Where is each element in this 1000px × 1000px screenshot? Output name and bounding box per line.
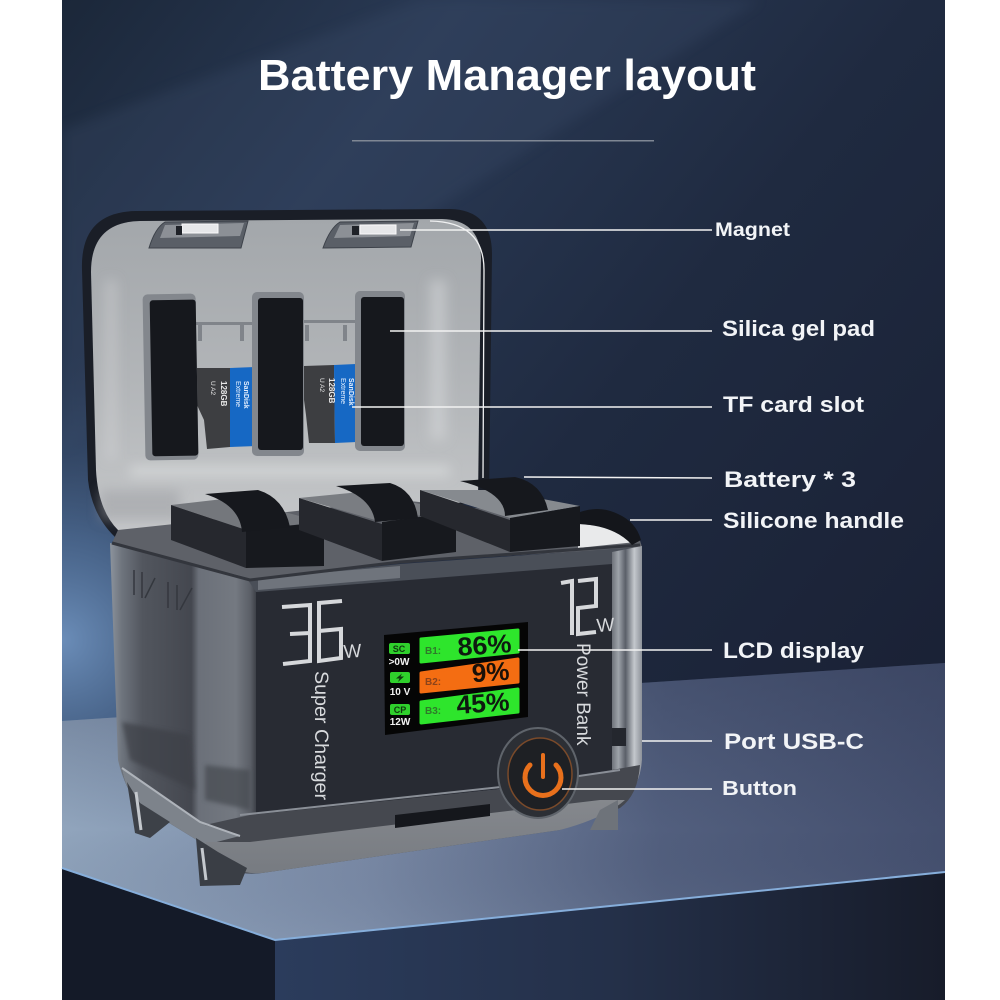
status column: CP — [394, 705, 406, 715]
battery 3 — [420, 477, 580, 552]
base body — [110, 543, 642, 886]
B1 bar: B1: — [425, 646, 441, 657]
B2 bar: 9% — [471, 656, 510, 688]
port slot — [395, 804, 490, 828]
12W mark — [561, 579, 615, 637]
status column: 10 V — [390, 687, 411, 698]
open lid — [82, 209, 492, 560]
B3 bar: 45% — [455, 686, 510, 720]
callout: Silica gel pad: Silica gel pad — [722, 316, 875, 341]
lid shading — [100, 280, 450, 520]
status column: >0W — [389, 657, 410, 668]
TF cards: U A2 — [209, 381, 216, 395]
lower tray — [205, 800, 625, 873]
battery 2 — [299, 483, 456, 561]
silicone handle — [580, 509, 641, 545]
TF cards: Extreme — [339, 378, 346, 404]
TF cards: SanDisk — [242, 381, 249, 409]
feet — [127, 782, 170, 838]
title rule — [352, 140, 654, 142]
bolt icon — [396, 674, 404, 682]
TF cards: 128GB — [327, 378, 336, 404]
power button — [498, 728, 578, 818]
callout: Magnet: Magnet — [715, 220, 791, 241]
lower band — [122, 765, 640, 874]
status column: SC — [393, 644, 406, 654]
battery 1 — [171, 490, 324, 568]
transparent shell left side — [110, 543, 258, 845]
callout: Port USB-C: Port USB-C — [724, 729, 864, 754]
TF cards — [197, 364, 357, 449]
TF cards: Extreme — [234, 381, 241, 407]
base top surface — [112, 500, 642, 580]
magnets — [149, 221, 418, 248]
B2 bar: B2: — [425, 677, 441, 688]
title: Battery Manager layout — [258, 51, 756, 100]
status column — [389, 643, 411, 728]
upper lip band — [248, 547, 640, 592]
lid highlight edge — [430, 221, 484, 478]
B2 bar — [421, 656, 518, 692]
status column: 12W — [390, 717, 411, 728]
callout: LCD display: LCD display — [723, 638, 865, 663]
TF cards: SanDisk — [347, 378, 354, 406]
white top patch — [578, 524, 636, 548]
callout: Button: Button — [722, 778, 797, 800]
TF cards: U A2 — [318, 378, 325, 392]
callout: Silicone handle: Silicone handle — [723, 508, 904, 533]
silica gel pads — [143, 291, 405, 460]
table surface — [62, 663, 945, 1000]
12W mark: W — [596, 615, 615, 637]
Super Charger label: Super Charger — [310, 671, 331, 801]
front dark panel — [256, 563, 612, 815]
product: battery manager case — [82, 209, 642, 886]
TF cards: 128GB — [219, 381, 228, 407]
batteries — [171, 477, 641, 568]
36W mark — [282, 601, 362, 664]
36W mark: W — [343, 641, 362, 663]
B1 bar — [421, 628, 518, 662]
B3 bar — [421, 686, 518, 723]
LCD display — [384, 622, 528, 735]
callout: Battery * 3: Battery * 3 — [724, 467, 856, 492]
background panel — [62, 0, 945, 721]
Power Bank label: Power Bank — [572, 643, 593, 746]
clip marks — [134, 570, 192, 610]
B3 bar: B3: — [425, 706, 441, 717]
right transparent edge — [612, 546, 642, 800]
card clip rails — [196, 320, 361, 341]
callout: TF card slot: TF card slot — [723, 392, 865, 417]
B1 bar: 86% — [456, 628, 512, 662]
